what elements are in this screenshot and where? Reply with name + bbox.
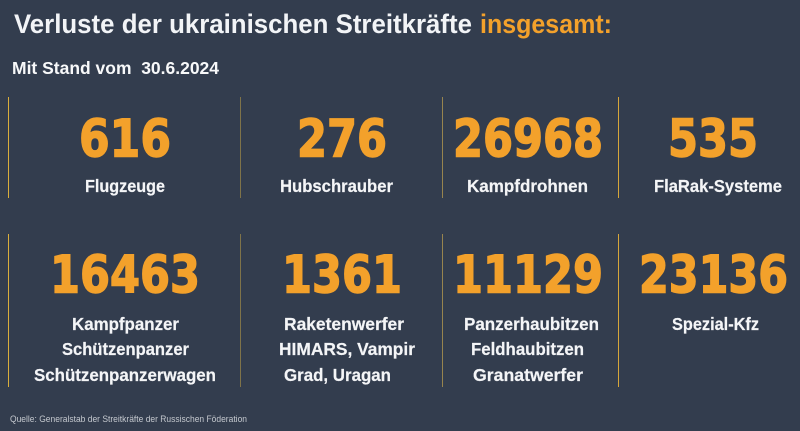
stat: Flugzeuge: Flugzeuge [85,176,165,196]
stat: Panzerhaubitzen group [453,246,603,385]
stat: Raketenwerfer group: Grad, Uragan [284,365,391,385]
stat: Hubschrauber: Hubschrauber [280,176,393,196]
stat: Panzerhaubitzen group: Granatwerfer [473,365,583,385]
stat: Spezial-Kfz [639,246,788,334]
stat: Kampfdrohnen: Kampfdrohnen [467,176,588,196]
stat: Panzerhaubitzen group: Feldhaubitzen [471,339,584,359]
stat: Kampfpanzer group: Schützenpanzer [62,339,189,359]
stat: Panzerhaubitzen group: 11129 [453,246,603,306]
stat: Raketenwerfer group: Raketenwerfer [284,314,404,334]
stat: Kampfpanzer group: Kampfpanzer [72,314,179,334]
stat: FlaRak-Systeme [654,110,782,196]
stat: Raketenwerfer group: HIMARS, Vampir [279,339,415,359]
stat: Kampfpanzer group [34,246,216,385]
source note: Quelle: Generalstab der Streitkräfte der Russischen Föderation [10,414,247,425]
stat: Spezial-Kfz: Spezial-Kfz [672,314,759,334]
stat: Raketenwerfer group: 1361 [282,246,402,306]
column dividers [8,97,618,387]
title: insgesamt: [480,9,612,39]
stat: Panzerhaubitzen group: Panzerhaubitzen [464,314,599,334]
stat: Kampfpanzer group: Schützenpanzerwagen [34,365,216,385]
stat: Flugzeuge [79,110,171,196]
title: Verluste der ukrainischen Streitkräfte [14,9,472,39]
stat: Raketenwerfer group [279,246,415,385]
stat: Hubschrauber: 276 [297,110,387,170]
stat: Kampfpanzer group: 16463 [50,246,200,306]
stat: Flugzeuge: 616 [79,110,171,170]
stat: Hubschrauber [280,110,393,196]
stat: FlaRak-Systeme: FlaRak-Systeme [654,176,782,196]
stat: FlaRak-Systeme: 535 [668,110,758,170]
stat: Kampfdrohnen [453,110,603,196]
stat: Kampfdrohnen: 26968 [453,110,603,170]
subtitle: date: Mit Stand vom 30.6.2024 [12,58,219,78]
